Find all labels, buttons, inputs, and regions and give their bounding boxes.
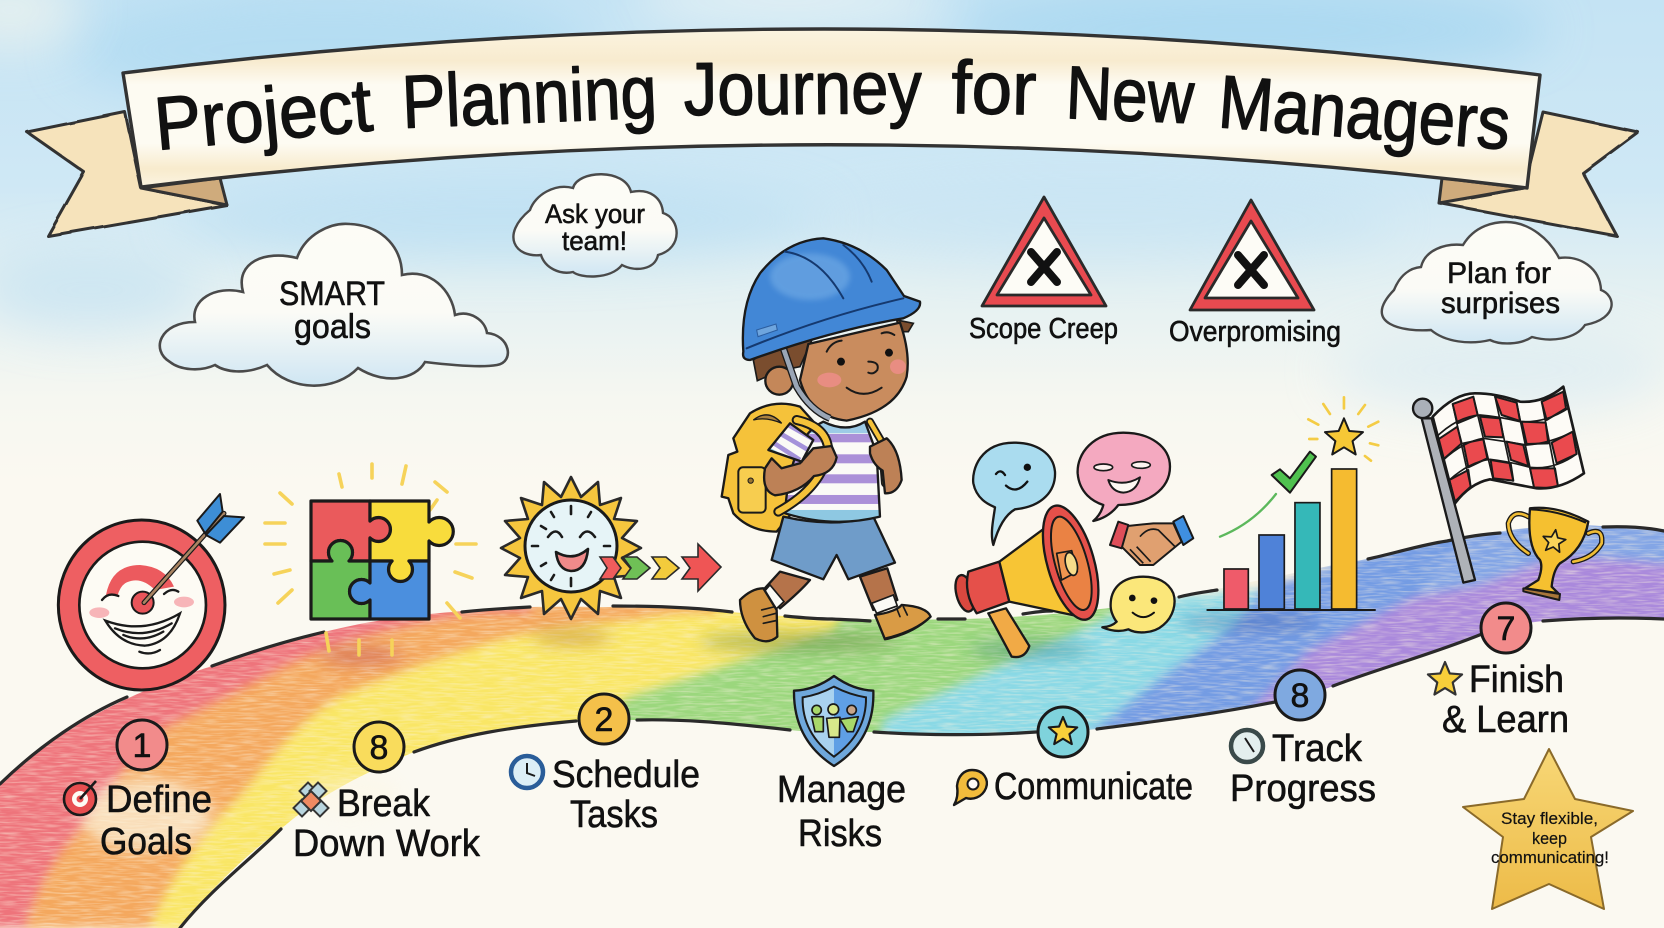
rays <box>265 464 476 655</box>
cloud: SMART goals: goals <box>294 308 371 346</box>
icon: target with arrow <box>58 494 244 690</box>
step 3: Schedule Tasks: 2 <box>595 701 613 739</box>
title banner <box>27 29 1638 236</box>
purple band <box>1246 550 1664 706</box>
trophy <box>1508 508 1602 600</box>
cloud: SMART goals <box>160 224 508 386</box>
orange band <box>25 600 740 928</box>
step 6: Track Progress: 8 <box>1291 677 1309 715</box>
title: Planning <box>400 49 658 144</box>
step 2: Break Down Work: Break <box>337 783 431 825</box>
icon: small puzzle <box>294 783 328 816</box>
legs and boots <box>740 568 931 641</box>
step 1: Define Goals: Define <box>106 779 212 821</box>
cloud: Ask your team: Ask your <box>545 199 645 229</box>
shorts <box>772 517 895 579</box>
head <box>753 320 913 421</box>
check mark <box>1220 452 1316 537</box>
icon: small speech bubble <box>954 770 987 805</box>
callout star: Stay flexible, keep communicating!: keep <box>1532 829 1567 848</box>
bar chart <box>1207 469 1375 610</box>
icon: small star <box>1428 662 1462 695</box>
warning sign: Overpromising: Overpromising <box>1169 316 1341 348</box>
left fold <box>141 178 227 205</box>
warning sign: Scope Creep: Scope Creep <box>969 313 1118 345</box>
icon: small clock <box>511 756 543 788</box>
callout star: Stay flexible, keep communicating! <box>1463 749 1633 909</box>
icon: small target <box>64 781 96 815</box>
step 1: Define Goals: Goals <box>100 821 192 863</box>
icon: small gauge <box>1231 730 1263 762</box>
title <box>151 45 1513 166</box>
title: Project <box>151 63 376 166</box>
smiley bubble <box>1102 577 1175 632</box>
rainbow road <box>0 500 1664 928</box>
step 2: Break Down Work: Down Work <box>293 823 481 865</box>
cloud: Ask your team <box>513 174 677 276</box>
step 7: Finish & Learn <box>1428 603 1569 741</box>
hero character: child with helmet and backpack <box>722 238 931 641</box>
step 7: Finish & Learn: 7 <box>1497 610 1515 648</box>
backpack <box>722 404 830 532</box>
banner body <box>123 29 1540 188</box>
step 1: Define Goals <box>64 720 212 863</box>
cloud: Plan for surprises: surprises <box>1441 287 1560 320</box>
shirt <box>780 420 883 527</box>
title: New <box>1064 50 1196 139</box>
step 3: Schedule Tasks <box>511 694 700 836</box>
step 4: Manage Risks <box>777 676 906 855</box>
blue band <box>1088 542 1454 730</box>
icon: communication cluster <box>952 397 1378 657</box>
warning sign: Scope Creep <box>969 197 1118 345</box>
megaphone <box>952 500 1109 657</box>
step 4: Manage Risks: Manage <box>777 769 906 811</box>
right fold <box>1439 178 1524 203</box>
cyan band <box>880 590 1260 745</box>
yellow band <box>150 600 850 928</box>
step 5: Communicate <box>954 707 1193 808</box>
red band <box>0 607 537 928</box>
cloud: Plan for surprises <box>1382 222 1612 343</box>
step 6: Track Progress: Track <box>1272 728 1363 770</box>
cloud: Ask your team: team! <box>562 226 627 256</box>
step 5: Communicate: Communicate <box>994 766 1193 808</box>
ground shadows <box>319 648 403 664</box>
cloud: Plan for surprises: Plan for <box>1447 257 1551 290</box>
step 1: Define Goals: 1 <box>133 727 151 765</box>
backpack straps <box>778 420 885 512</box>
arrow chevrons <box>600 557 621 579</box>
icon: sun clock with arrow <box>501 477 721 619</box>
star with rays <box>1308 397 1378 461</box>
road outlines <box>0 527 1664 928</box>
speech bubble: pink <box>1078 433 1170 521</box>
step 4: Manage Risks: Risks <box>798 813 882 855</box>
arms and sleeve <box>763 420 902 495</box>
step 7: Finish & Learn: & Learn <box>1442 699 1569 741</box>
cloud: SMART goals: SMART <box>279 275 385 313</box>
left ribbon tail <box>27 112 227 236</box>
step 7: Finish & Learn: Finish <box>1469 659 1564 701</box>
handshake <box>1110 516 1193 565</box>
icon: puzzle <box>265 464 476 655</box>
title: for <box>951 45 1037 130</box>
step 2: Break Down Work: 8 <box>370 729 388 767</box>
icon: checkered flag <box>1413 383 1602 600</box>
callout star: Stay flexible, keep communicating!: Stay flexible, <box>1501 809 1598 828</box>
title: Managers <box>1216 59 1513 165</box>
callout star: Stay flexible, keep communicating!: communicating! <box>1491 848 1609 867</box>
green band <box>590 600 1140 745</box>
warning sign: Overpromising <box>1169 200 1341 348</box>
step 3: Schedule Tasks: Tasks <box>570 794 658 836</box>
icon: shield <box>794 676 873 766</box>
step 6: Track Progress <box>1230 670 1376 810</box>
title: Journey <box>683 45 923 131</box>
right ribbon tail <box>1439 112 1638 236</box>
step 3: Schedule Tasks: Schedule <box>552 754 700 796</box>
speech bubble: blue <box>973 443 1055 545</box>
step 2: Break Down Work <box>293 722 481 865</box>
label halos <box>80 773 400 851</box>
step 6: Track Progress: Progress <box>1230 768 1376 810</box>
helmet <box>743 238 920 360</box>
